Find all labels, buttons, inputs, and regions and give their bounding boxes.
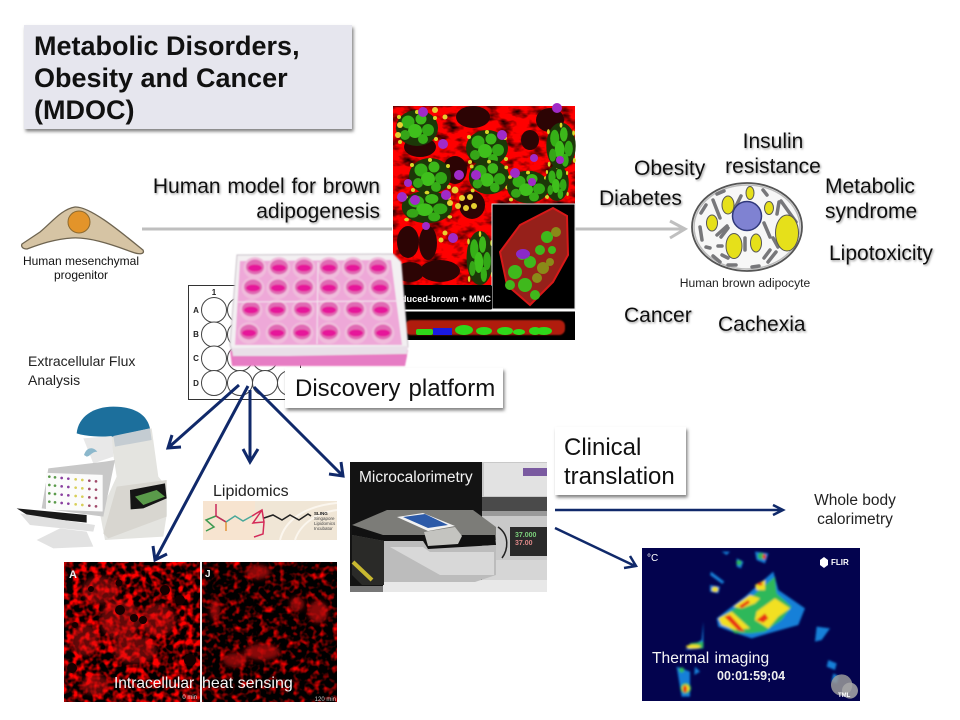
- label: cachexia: Cachexia: [718, 313, 806, 336]
- label: lipotoxicity: Lipotoxicity: [829, 242, 933, 265]
- divider between heat sensing photos: [200, 562, 202, 702]
- well plate schematic: C: [193, 354, 199, 363]
- micrograph caption: [393, 286, 492, 309]
- label: human mesenchymal progenitor: progenitor: [54, 268, 108, 282]
- micrograph: induced brown adipocytes: [393, 103, 576, 340]
- heading: clinical translation: [555, 427, 686, 495]
- label: thermal imaging: Thermal imaging: [652, 650, 769, 667]
- photo: microcalorimetry instrument: 37.000: [515, 532, 537, 539]
- photo: FLIR thermal image: °C: [647, 553, 658, 564]
- label: whole body calorimetry: Whole body: [814, 492, 896, 509]
- label: intracellular heat sensing: Intracellular: [114, 675, 194, 692]
- label: diabetes: Diabetes: [599, 187, 682, 210]
- label: insulin resistance: Insulin: [743, 130, 803, 153]
- label: extracellular flux analysis: Extracellular Flux: [28, 353, 135, 369]
- arrows: clinical translation outcomes: [555, 505, 783, 568]
- graphic: lipid chain, Singapore Lipidomics Incubator: SLING: [314, 511, 328, 516]
- label: metabolic syndrome: Metabolic: [825, 175, 915, 198]
- well plate schematic: B: [193, 330, 199, 339]
- photo: 24-well culture plate: [230, 254, 408, 366]
- photo: XF extracellular flux analyser: [17, 407, 167, 548]
- photo: microcalorimetry instrument: [350, 462, 547, 592]
- graphic: lipid chain, Singapore Lipidomics Incubator: Incubator: [314, 526, 333, 531]
- label: metabolic syndrome: syndrome: [825, 200, 917, 223]
- label: intracellular heat sensing: heat sensing: [202, 675, 293, 692]
- graphic: lipid chain, Singapore Lipidomics Incubator: [203, 501, 337, 540]
- micrograph cross-section: [393, 312, 575, 340]
- label: extracellular flux analysis: Analysis: [28, 372, 80, 388]
- label: whole body calorimetry: calorimetry: [817, 511, 893, 528]
- photo: intracellular heat sensing, 0 min: [64, 562, 200, 702]
- photo: intracellular heat sensing, 0 min: A: [69, 569, 77, 581]
- photo: intracellular heat sensing, 0 min: 0 min: [182, 695, 197, 701]
- title box: [24, 25, 352, 129]
- heading: discovery platform: [285, 368, 503, 408]
- label: human mesenchymal progenitor: Human mesenchymal: [23, 254, 139, 268]
- photo: microcalorimetry instrument: 37.00: [515, 540, 533, 547]
- photo: FLIR thermal image: TML: [838, 693, 851, 699]
- heading: clinical translation: translation: [564, 463, 675, 490]
- label: lipidomics: Lipidomics: [213, 483, 289, 500]
- heading: discovery platform: Discovery platform: [295, 375, 495, 402]
- title box: (MDOC): [34, 95, 134, 125]
- label: obesity: Obesity: [634, 157, 706, 180]
- disease labels: [599, 130, 933, 336]
- photo: intracellular heat sensing, 120 min: 120 min: [315, 697, 336, 703]
- micrograph inset: [492, 204, 575, 309]
- well plate schematic: 1: [212, 288, 217, 297]
- label: microcalorimetry: Microcalorimetry: [359, 469, 473, 486]
- label: cancer: Cancer: [624, 304, 692, 327]
- photo: FLIR thermal image: 00:01:59;04: [717, 669, 785, 683]
- icon: human brown adipocyte: [692, 183, 802, 271]
- heading: clinical translation: Clinical: [564, 434, 641, 461]
- label: human model for brown adipogenesis: Human model for brown: [153, 175, 380, 198]
- label: human model for brown adipogenesis: adipogenesis: [256, 200, 380, 223]
- arrows: discovery platform to assays: [153, 385, 343, 560]
- well plate schematic: A: [193, 306, 199, 315]
- photo: FLIR thermal image: FLIR: [831, 558, 849, 567]
- photo: intracellular heat sensing, 120 min: J: [205, 569, 211, 580]
- arrow: progenitor to adipocyte: [142, 221, 685, 238]
- micrograph caption: Induced-brown + MMC: [393, 294, 491, 304]
- title box: Obesity and Cancer: [34, 63, 288, 93]
- label: human brown adipocyte: Human brown adipocyte: [680, 276, 810, 290]
- label: insulin resistance: resistance: [725, 155, 821, 178]
- icon: human mesenchymal progenitor cell: [22, 207, 143, 254]
- graphic: lipid chain, Singapore Lipidomics Incubator: Singapore: [314, 516, 335, 521]
- photo: intracellular heat sensing, 120 min: [202, 562, 337, 703]
- photo: FLIR thermal image: [642, 548, 860, 701]
- well plate schematic: [188, 286, 302, 400]
- graphic: lipid chain, Singapore Lipidomics Incubator: Lipidomics: [314, 521, 336, 526]
- well plate schematic: D: [193, 379, 199, 388]
- title box: Metabolic Disorders,: [34, 31, 300, 61]
